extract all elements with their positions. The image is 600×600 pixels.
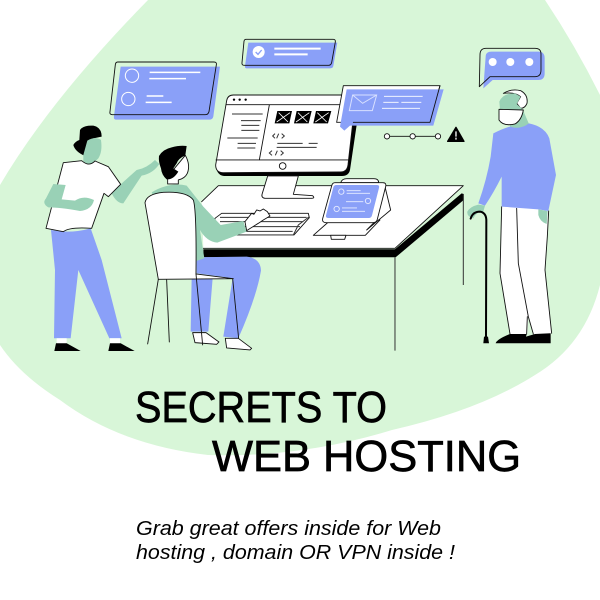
head and neck <box>499 93 529 129</box>
shoes <box>496 333 551 343</box>
title: WEB HOSTING <box>212 432 521 481</box>
panel: check status card <box>242 39 337 68</box>
monitor stand <box>262 176 314 198</box>
subtitle text: Grab great offers inside for Web <box>136 517 441 540</box>
icon: warning triangle <box>448 127 464 141</box>
beard <box>499 109 523 125</box>
speech bubble <box>479 48 545 88</box>
hands <box>467 205 548 224</box>
person: seated man <box>145 146 270 350</box>
close tiles <box>275 111 331 123</box>
trousers <box>51 228 122 338</box>
hair <box>73 126 102 156</box>
tablet <box>313 179 391 239</box>
feet <box>57 338 120 344</box>
sweater <box>478 123 556 211</box>
person: standing man <box>44 126 159 351</box>
subtitle text: hosting , domain OR VPN inside ! <box>136 541 455 564</box>
desk <box>202 186 464 351</box>
face <box>83 138 101 164</box>
trousers <box>500 207 552 334</box>
far arm <box>112 160 159 203</box>
shoes <box>193 333 252 350</box>
shirt <box>46 161 121 232</box>
cane <box>471 212 486 337</box>
torso and arm <box>152 185 247 263</box>
icon: envelope <box>349 95 377 111</box>
panel: email bubble <box>337 86 444 131</box>
title: SECRETS TO <box>135 383 387 432</box>
subtitle text <box>136 517 455 564</box>
monitor <box>216 95 357 198</box>
keyboard <box>213 213 309 235</box>
person: old man with cane <box>467 48 556 343</box>
neck and face <box>168 155 189 184</box>
background green blob <box>0 0 600 455</box>
near arm <box>44 184 94 211</box>
timeline with warning icon <box>384 127 464 141</box>
blue trousers <box>191 257 261 338</box>
chair <box>145 192 233 279</box>
panel: profile list card <box>110 62 220 120</box>
hair <box>159 146 187 179</box>
hair <box>503 90 527 108</box>
hand <box>245 209 270 231</box>
title <box>135 383 521 481</box>
